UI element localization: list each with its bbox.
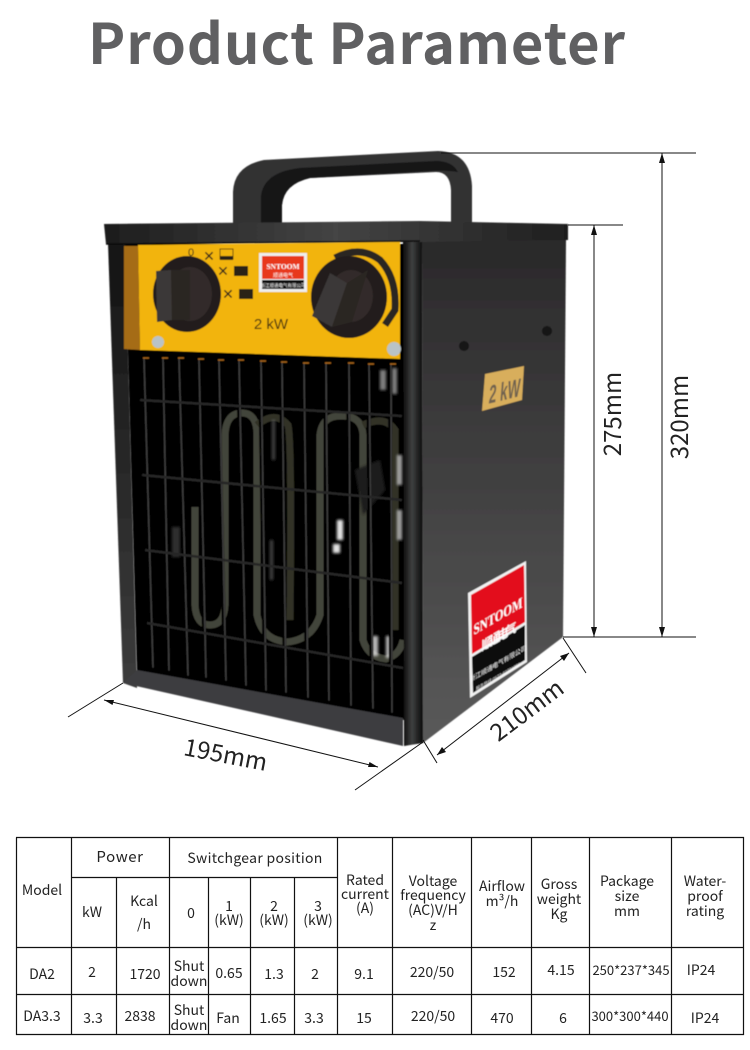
table header text: (kW) xyxy=(214,910,244,930)
row DA2: Shut xyxy=(174,956,205,976)
table grid xyxy=(16,837,744,1034)
table header text: Rated xyxy=(346,870,384,890)
row DA2: down xyxy=(171,971,207,991)
table header text: Model xyxy=(22,880,62,900)
row DA3.3: 1.65 xyxy=(259,1008,287,1028)
row DA2: 1.3 xyxy=(264,964,284,984)
row DA2: 152 xyxy=(492,962,516,982)
position icons: 0 xyxy=(188,247,194,259)
heating coils xyxy=(195,413,403,659)
dimension: height 320mm: 320mm xyxy=(660,375,695,459)
side brand sticker: 顺通电气 xyxy=(482,616,516,655)
row DA3.3: 300*300*440 xyxy=(591,1006,669,1025)
side brand sticker: 浙江顺通电气有限公司 xyxy=(470,642,526,684)
table header text: size xyxy=(615,886,640,906)
dimension: height 320mm xyxy=(441,153,696,637)
front frame bottom rail xyxy=(123,670,403,746)
row DA2: 250*237*345 xyxy=(592,960,670,979)
row DA3.3: 470 xyxy=(490,1008,514,1028)
side panel xyxy=(422,240,566,743)
side brand sticker: SNTOOM xyxy=(474,595,522,639)
table header text: Package xyxy=(600,871,654,891)
panel power text: 2 kW xyxy=(254,316,289,333)
row DA3.3: 220/50 xyxy=(411,1006,455,1026)
row DA2: 2 xyxy=(88,962,96,982)
product photo: heater xyxy=(104,151,568,746)
row DA2: 0.65 xyxy=(215,963,243,983)
panel screws xyxy=(152,336,164,348)
panel logo label: 顺通电气 xyxy=(273,272,293,279)
row DA3.3: down xyxy=(171,1015,207,1035)
table header text: frequency xyxy=(400,885,466,905)
row DA3.3: IP24 xyxy=(691,1008,719,1028)
grille bar orange tips xyxy=(143,358,396,364)
row DA3.3: 3.3 xyxy=(83,1008,103,1028)
side brand sticker: 服务热线:0577-62721058 xyxy=(476,660,520,693)
row DA2: IP24 xyxy=(687,960,715,980)
row DA3.3: 2838 xyxy=(124,1006,156,1026)
grille bar highlights xyxy=(144,358,392,712)
fan blades behind grille xyxy=(355,460,385,515)
grille horizontal wires xyxy=(140,400,403,668)
row DA2: 220/50 xyxy=(410,962,454,982)
parameter table xyxy=(16,837,744,1035)
side 2 kW badge xyxy=(482,366,524,411)
table header text: Switchgear position xyxy=(187,848,323,868)
panel logo label: SNTOOM xyxy=(266,262,300,271)
table header text: (AC)V/H xyxy=(408,900,458,920)
front frame left column xyxy=(108,243,137,688)
table header text: Water- xyxy=(684,871,726,891)
yellow control panel xyxy=(124,242,401,359)
side 2 kW badge: 2 kW xyxy=(488,374,521,410)
table header text: Voltage xyxy=(409,871,458,891)
side brand sticker xyxy=(468,561,527,698)
right knob xyxy=(311,252,395,338)
table header text: rating xyxy=(686,901,724,921)
table header text: Power xyxy=(96,846,144,867)
dimension: height 275mm: 275mm xyxy=(593,372,628,456)
table header text: z xyxy=(430,915,437,935)
row DA2: 4.15 xyxy=(547,960,575,980)
front frame right column xyxy=(403,241,423,746)
table header text: /h xyxy=(137,914,151,934)
position icons xyxy=(188,247,253,302)
row DA3.3: 15 xyxy=(356,1008,372,1028)
table header text: (A) xyxy=(356,898,374,918)
row DA3.3: 6 xyxy=(559,1008,567,1028)
table header text: Kcal xyxy=(130,891,158,911)
table header text: Airflow xyxy=(479,876,525,896)
heater handle xyxy=(233,151,472,224)
side screws xyxy=(459,341,469,351)
table header text: kW xyxy=(82,902,102,922)
table header text: weight xyxy=(537,889,582,909)
position icons: ✕ xyxy=(222,286,234,302)
dimension: height 275mm xyxy=(568,225,628,637)
position icons: ✕ xyxy=(203,248,215,264)
table header text: (kW) xyxy=(259,910,289,930)
grille cavity xyxy=(125,244,404,720)
row DA3.3: 3.3 xyxy=(304,1008,324,1028)
panel logo label: 浙江顺通电气有限公司 xyxy=(260,282,306,289)
table header text: 2 xyxy=(270,896,278,916)
left knob xyxy=(153,256,221,332)
table header text: mm xyxy=(614,901,640,921)
row DA3.3: DA3.3 xyxy=(23,1006,61,1026)
dimension: width 195mm xyxy=(68,683,423,790)
row DA3.3: Shut xyxy=(174,1000,205,1020)
dimension: depth 210mm xyxy=(423,638,586,763)
row DA3.3 xyxy=(23,1000,719,1035)
table header text: 3 xyxy=(314,896,322,916)
reflections behind grille xyxy=(172,368,402,658)
row DA3.3: Fan xyxy=(216,1008,240,1028)
table header text: 1 xyxy=(225,896,233,916)
row DA2: DA2 xyxy=(29,964,55,984)
table header text: (kW) xyxy=(303,910,333,930)
table header text: proof xyxy=(687,886,723,906)
grille vertical bars xyxy=(143,358,391,712)
table header text xyxy=(22,846,726,935)
title: Product Parameter xyxy=(88,0,626,81)
panel logo label xyxy=(259,253,307,292)
dimension: width 195mm: 195mm xyxy=(181,727,271,778)
table header text: Kg xyxy=(551,904,568,924)
table header text: Gross xyxy=(541,874,578,894)
dimension: depth 210mm: 210mm xyxy=(481,669,570,748)
row DA2: 1720 xyxy=(129,964,161,984)
position icons: ✕ xyxy=(217,263,229,279)
table header text: current xyxy=(341,884,390,904)
table header text: m³/h xyxy=(486,891,518,911)
row DA2: 9.1 xyxy=(354,964,374,984)
row DA2: 2 xyxy=(311,964,319,984)
table header text: 0 xyxy=(187,903,195,923)
row DA2 xyxy=(29,956,715,991)
lid xyxy=(104,221,568,244)
